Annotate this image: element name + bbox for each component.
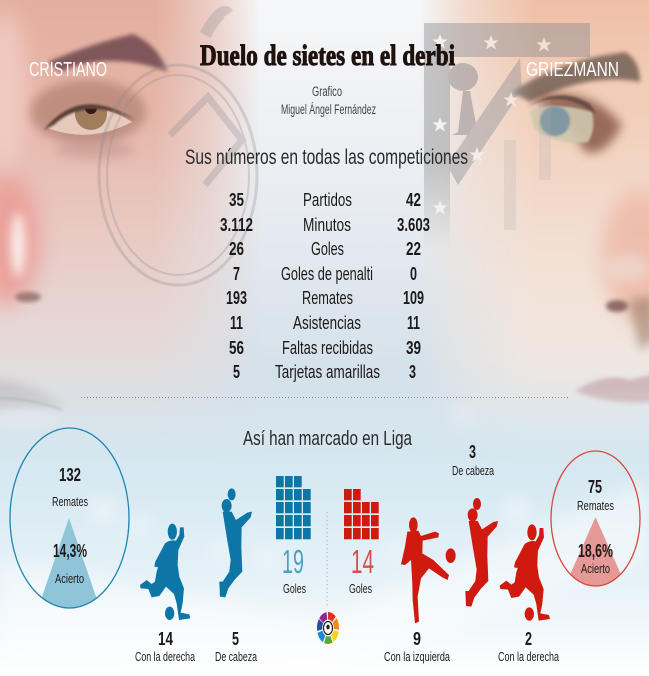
panel: Cristiano shots circle: 14,3% [53, 540, 87, 561]
crest: Atletico [424, 23, 590, 250]
table: stats: 26 [229, 239, 244, 259]
table: stats: Goles de penalti [281, 264, 373, 284]
nostril [15, 292, 41, 302]
credit: Miguel Ángel Fernández [281, 102, 376, 117]
heading: all competitions: Sus números en todas las competiciones [185, 146, 468, 169]
table: stats: Partidos [303, 190, 352, 210]
table: stats: 11 [230, 313, 243, 333]
panel: Griezmann shots circle: Remates [577, 498, 614, 513]
table: stats: 7 [233, 264, 240, 284]
heading: league goals: Así han marcado en Liga [243, 428, 413, 450]
lips [0, 378, 62, 411]
panel: Cristiano shots circle: Remates [52, 494, 88, 509]
table: stats: 0 [410, 264, 417, 284]
credit [281, 84, 376, 117]
number: Griezmann 14 goals: 14 [351, 543, 374, 580]
photo: Griezmann face [428, 0, 649, 421]
label: 5 headers [215, 628, 258, 664]
label: 14 right foot: Con la derecha [135, 649, 196, 664]
table: stats: 22 [406, 239, 421, 259]
panel: Griezmann shots circle: 18,6% [578, 540, 613, 561]
table: stats: Tarjetas amarillas [275, 362, 380, 382]
table: stats: 42 [406, 190, 421, 210]
photo: Cristiano face [0, 0, 252, 424]
panel: Griezmann shots circle: 75 [588, 476, 602, 497]
label: 9 left foot [384, 628, 451, 664]
eye socket [30, 80, 146, 144]
icon: LaLiga logo [319, 615, 337, 640]
number: Cristiano 19 goals: Goles [283, 581, 306, 596]
label: 14 right foot: 14 [158, 628, 174, 649]
label: 3 headers: De cabeza [452, 463, 495, 478]
label: 2 right foot: Con la derecha [498, 649, 560, 664]
number: Griezmann 14 goals [349, 543, 374, 596]
credit: Grafico [312, 84, 342, 99]
label: 5 headers: 5 [232, 628, 239, 649]
table: stats: Faltas recibidas [282, 338, 373, 358]
eye [530, 106, 593, 143]
panel: Cristiano shots circle: 132 [59, 464, 81, 485]
label: 3 headers: 3 [469, 441, 476, 462]
panel: Cristiano shots circle [10, 428, 129, 620]
chart: Griezmann goals grid [344, 489, 379, 539]
table: stats: 193 [226, 288, 247, 308]
table: stats: 3.112 [220, 215, 253, 235]
table: stats: 3.603 [397, 215, 430, 235]
label: 9 left foot: Con la izquierda [384, 649, 451, 664]
table: stats: 3 [409, 362, 416, 382]
table: stats: Asistencias [293, 313, 361, 333]
eyebrow [512, 52, 640, 102]
icon: blue header [219, 488, 252, 597]
label: 5 headers: De cabeza [215, 649, 258, 664]
panel: Griezmann shots circle [551, 451, 640, 595]
label: 2 right foot: 2 [525, 628, 532, 649]
table: stats: 56 [229, 338, 244, 358]
table: stats: 5 [233, 362, 240, 382]
panel: Cristiano shots circle: Acierto [55, 571, 84, 586]
table: stats: 35 [229, 190, 244, 210]
table: stats: 11 [407, 313, 420, 333]
panel: Griezmann shots circle: Acierto [581, 561, 610, 576]
table: stats: 39 [406, 338, 421, 358]
table: stats: Minutos [303, 215, 351, 235]
table: stats: Goles [311, 239, 344, 259]
chart: Cristiano goals grid [276, 476, 311, 539]
eye shadow [535, 94, 622, 153]
eye [44, 102, 134, 135]
crest: Real Madrid [99, 12, 257, 285]
nose [602, 190, 649, 320]
eyebrow [48, 34, 168, 72]
label: 3 headers [452, 441, 495, 478]
player name: Griezmann: GRIEZMANN [526, 59, 619, 81]
label: 2 right foot [498, 628, 560, 664]
icon: blue kicker [140, 524, 190, 620]
table: stats [220, 190, 430, 382]
icon: red header [465, 498, 498, 607]
icon: red kicker [500, 524, 550, 621]
table: stats: Remates [302, 288, 353, 308]
label: 9 left foot: 9 [413, 628, 421, 649]
title: Duelo de sietes en el derbi [200, 39, 455, 72]
nose highlight [0, 10, 40, 305]
icon: red left-foot volley [401, 517, 456, 623]
lips [575, 374, 649, 403]
table: stats: 109 [403, 288, 424, 308]
number: Cristiano 19 goals: 19 [282, 543, 304, 580]
number: Griezmann 14 goals: Goles [349, 581, 372, 596]
number: Cristiano 19 goals [282, 543, 306, 596]
label: 14 right foot [135, 628, 196, 664]
player name: Cristiano: CRISTIANO [29, 59, 107, 81]
